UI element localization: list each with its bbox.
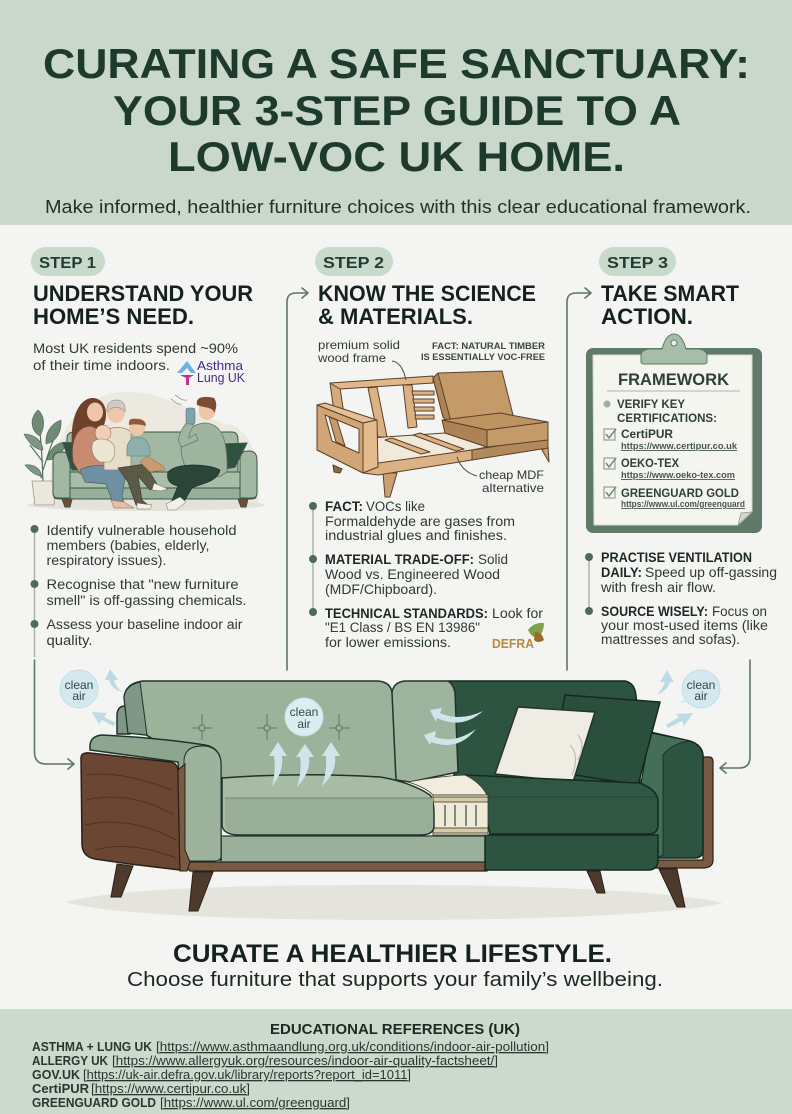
step 2 bullets: Solid <box>478 552 508 567</box>
back slats <box>412 391 434 419</box>
step 1 bullets <box>30 523 246 657</box>
plant <box>24 410 66 505</box>
leader line: MDF <box>457 457 477 476</box>
references footer: GOV.UK <box>32 1067 81 1082</box>
checklist item: GREENGUARD GOLD: https://www.ul.com/greenguard <box>621 499 745 509</box>
references footer: GREENGUARD GOLD <box>32 1095 156 1110</box>
indoor time statement: of their time indoors. <box>33 357 170 373</box>
front rail <box>363 450 472 475</box>
references footer <box>0 1009 792 1114</box>
references footer: [https://www.certipur.co.uk] <box>91 1081 250 1096</box>
cream pillow <box>495 707 595 782</box>
connector arrows between steps <box>34 288 750 773</box>
closing message: Choose furniture that supports your family’s wellbeing. <box>127 969 663 991</box>
back posts <box>330 383 348 440</box>
step 2 badge: STEP 2 <box>323 255 384 272</box>
clipboard clip <box>641 334 707 364</box>
clean air badge left: clean <box>65 678 93 692</box>
illustration: wooden sofa frame <box>317 371 549 497</box>
references footer: EDUCATIONAL REFERENCES (UK) <box>270 1021 520 1038</box>
clean air badge right: clean <box>687 678 715 692</box>
dark pillow <box>553 695 660 785</box>
air arrows left <box>92 669 123 726</box>
arm frame side <box>317 405 363 473</box>
subtitle: Make informed, healthier furniture choices with this clear educational framework. <box>45 196 751 217</box>
rising clean air arrows <box>269 742 340 787</box>
woman with baby <box>72 398 134 508</box>
label: natural timber fact: FACT: NATURAL TIMBER <box>432 341 546 351</box>
label: natural timber fact: IS ESSENTIALLY VOC-FREE <box>421 352 545 362</box>
step 2 bullets <box>309 499 544 650</box>
label: cheap MDF alternative: cheap MDF <box>479 468 544 482</box>
step 2 bullets: "E1 Class / BS EN 13986" <box>325 620 480 635</box>
child <box>127 418 165 472</box>
checklist item: CertiPUR <box>604 427 737 451</box>
references footer: ASTHMA + LUNG UK <box>32 1039 153 1054</box>
step 3 bullets: your most-used items (like <box>601 618 768 633</box>
step 3 badge <box>599 247 676 276</box>
back left small piece <box>117 706 130 734</box>
label: premium solid wood frame <box>317 338 400 365</box>
checklist item: CertiPUR: https://www.certipur.co.uk <box>621 441 737 451</box>
checklist item: CertiPUR: CertiPUR <box>621 427 673 441</box>
step 2 bullets: Look for <box>492 606 544 621</box>
logo: Asthma + Lung UK: Lung UK <box>197 371 246 385</box>
step 3 heading: ACTION. <box>601 304 693 329</box>
step 1 bullets: Identify vulnerable household <box>46 523 236 538</box>
illustration: family on sofa <box>24 392 265 511</box>
step 3 heading: TAKE SMART <box>601 281 740 306</box>
step 3 bullets: SOURCE WISELY: <box>601 604 708 619</box>
sage lower band <box>221 836 488 862</box>
label: cheap MDF alternative: alternative <box>482 481 544 495</box>
step 1 heading: UNDERSTAND YOUR <box>33 281 253 306</box>
step 1 badge: STEP 1 <box>39 255 96 272</box>
clean air badge centre: clean <box>290 705 318 719</box>
step 1 bullets: quality. <box>46 633 92 648</box>
step 3 column <box>585 247 777 647</box>
label: natural timber fact <box>421 341 546 362</box>
step 3 badge: STEP 3 <box>607 255 668 272</box>
step 3 bullets: Speed up off-gassing <box>645 565 777 580</box>
step 3 heading <box>601 281 740 329</box>
right arm <box>640 732 703 858</box>
clean air badge left <box>60 670 98 708</box>
step 1 bullets: members (babies, elderly, <box>46 538 210 553</box>
checklist item: GREENGUARD GOLD <box>604 486 745 509</box>
right wood side <box>653 757 713 868</box>
step 2 bullets: for lower emissions. <box>325 635 451 650</box>
step 1 badge <box>31 247 105 276</box>
step 1 bullets: smell" is off-gassing chemicals. <box>46 593 246 608</box>
step 1 heading: HOME’S NEED. <box>33 304 194 329</box>
grandparent <box>104 400 168 509</box>
label: cheap MDF alternative <box>479 468 544 495</box>
step 3 bullets: with fresh air flow. <box>600 580 716 595</box>
exposed mattress layers <box>408 775 488 835</box>
clipboard: framework checklist: VERIFY KEY <box>617 397 685 411</box>
clipboard: framework checklist: CERTIFICATIONS: <box>617 411 717 425</box>
title: LOW-VOC UK HOME. <box>168 133 625 180</box>
step 2 bullets: TECHNICAL STANDARDS: <box>325 606 488 621</box>
clipboard: framework checklist: FRAMEWORK <box>618 370 730 389</box>
title <box>43 40 750 180</box>
checklist item: OEKO-TEX <box>604 456 735 480</box>
logo: Asthma + Lung UK: Asthma <box>197 359 243 373</box>
swirling air arrows <box>424 708 483 745</box>
step 2 bullets: VOCs like <box>366 499 425 514</box>
references footer: ALLERGY UK <box>32 1053 109 1068</box>
step 2 bullets: industrial glues and finishes. <box>325 528 507 543</box>
step 2 heading: & MATERIALS. <box>318 304 473 329</box>
cushion block <box>433 371 513 422</box>
clean air badge centre: air <box>297 717 311 731</box>
closing message: CURATE A HEALTHIER LIFESTYLE. <box>173 940 612 968</box>
clean air badge left: air <box>72 689 86 703</box>
clean air badge right: air <box>694 689 708 703</box>
tufted buttons <box>192 714 350 740</box>
step 2 heading: KNOW THE SCIENCE <box>318 281 536 306</box>
centre sage back cushion <box>392 681 458 782</box>
step 2 bullets: Wood vs. Engineered Wood <box>325 567 500 582</box>
logo: DEFRA: DEFRA <box>492 636 535 651</box>
references footer: [https://www.ul.com/greenguard] <box>160 1095 350 1110</box>
floor shadow <box>65 885 723 920</box>
label: premium solid wood frame: premium solid <box>318 338 400 352</box>
step 3 bullets: mattresses and sofas). <box>601 632 740 647</box>
sofa legs <box>111 864 685 911</box>
air arrows right <box>657 670 693 728</box>
step 1 column <box>24 247 265 657</box>
title: CURATING A SAFE SANCTUARY: <box>43 40 750 87</box>
step 1 bullets: Recognise that "new furniture <box>46 577 238 592</box>
sage seat cushion <box>222 775 434 835</box>
step 2 bullets: (MDF/Chipboard). <box>325 582 437 597</box>
left wood side panel <box>81 753 190 871</box>
checklist item: OEKO-TEX: OEKO-TEX <box>621 456 679 470</box>
step 1 bullets: respiratory issues). <box>46 553 166 568</box>
sage back cushion <box>124 681 398 782</box>
leader line: solid wood <box>392 361 406 380</box>
indoor time statement: Most UK residents spend ~90% <box>33 340 238 356</box>
references footer: [https://uk-air.defra.gov.uk/library/reports?report_id=1011] <box>83 1067 411 1082</box>
step 1 heading <box>33 281 253 329</box>
left arm top <box>90 735 221 860</box>
label: premium solid wood frame: wood frame <box>317 351 386 365</box>
dark seat cushion <box>465 775 658 834</box>
step 3 bullets: PRACTISE VENTILATION <box>601 550 752 565</box>
legs <box>383 473 397 497</box>
illustration: half sage half dark green sofa <box>60 669 723 920</box>
step 3 bullets: Focus on <box>712 604 767 619</box>
seat base <box>340 433 487 465</box>
sofa <box>53 432 257 507</box>
checklist item: GREENGUARD GOLD: GREENGUARD GOLD <box>621 486 739 500</box>
step 3 bullets <box>585 550 777 647</box>
clipboard: framework checklist <box>586 334 762 533</box>
clean air badge centre <box>285 698 323 736</box>
step 2 column <box>309 247 549 651</box>
step 2 badge <box>315 247 393 276</box>
dark lower band <box>485 835 658 870</box>
man with inhaler <box>166 395 227 510</box>
step 3 bullets: DAILY: <box>601 565 642 580</box>
references footer: [https://www.allergyuk.org/resources/indoor-air-quality-factsheet/] <box>112 1053 498 1068</box>
references footer: [https://www.asthmaandlung.org.uk/conditions/indoor-air-pollution] <box>156 1039 549 1054</box>
step 2 bullets: Formaldehyde are gases from <box>325 514 515 529</box>
logo: DEFRA <box>492 623 544 651</box>
step 2 bullets: MATERIAL TRADE-OFF: <box>325 552 474 567</box>
references footer: CertiPUR <box>32 1081 90 1096</box>
baby <box>92 425 115 462</box>
title: YOUR 3-STEP GUIDE TO A <box>113 87 681 134</box>
header band <box>0 0 792 225</box>
clean air badge right <box>677 670 720 708</box>
step 2 heading <box>318 281 536 329</box>
checklist item: OEKO-TEX: https://www.oeko-tex.com <box>621 470 735 480</box>
bottom rail <box>180 862 487 871</box>
step 2 bullets: FACT: <box>325 499 363 514</box>
closing message <box>127 940 663 991</box>
logo: Asthma + Lung UK <box>177 359 246 385</box>
step 1 bullets: Assess your baseline indoor air <box>46 617 243 632</box>
MDF front <box>472 438 548 460</box>
indoor time statement <box>33 340 238 373</box>
back top rail <box>330 376 433 389</box>
dark back cushion <box>448 681 640 790</box>
